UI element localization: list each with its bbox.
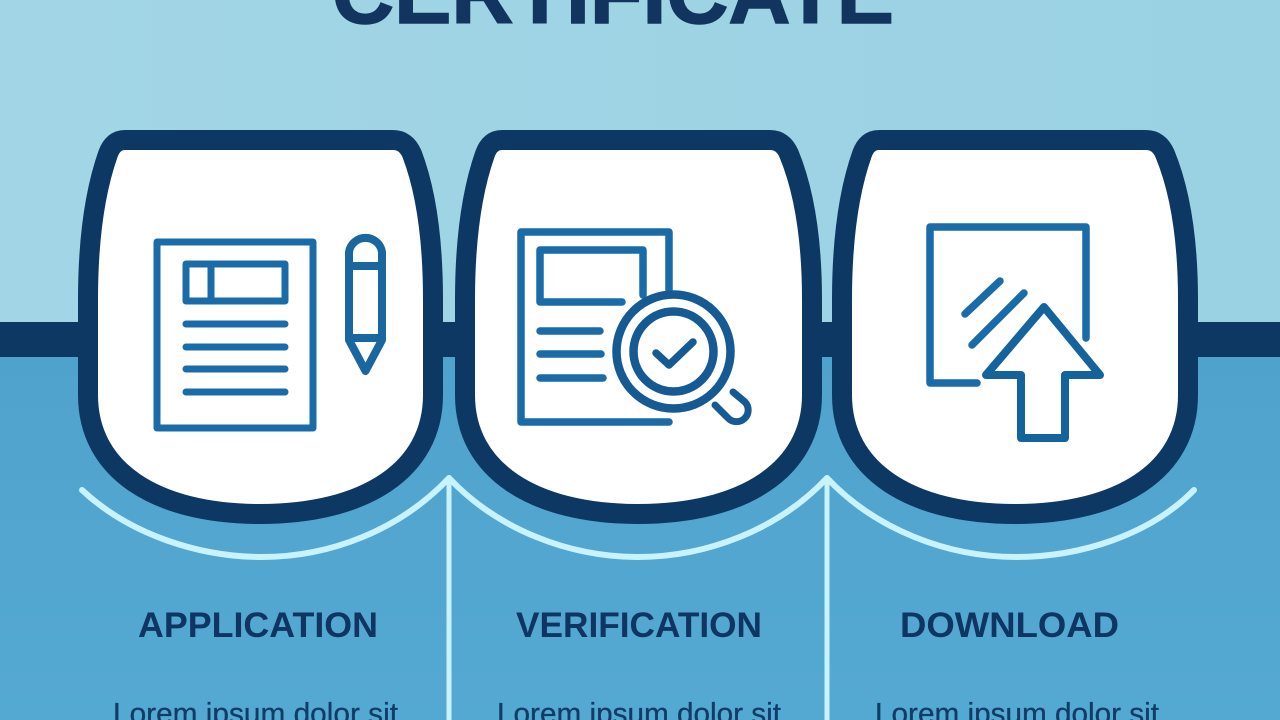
- heading: verification: VERIFICATION: [516, 606, 762, 645]
- icon: magnifier with check: [616, 294, 748, 422]
- dividers and arcs: [82, 478, 1194, 720]
- panel shape: [465, 140, 812, 514]
- panel shape: [88, 140, 433, 514]
- heading: application: APPLICATION: [138, 606, 378, 645]
- icon: pencil: [349, 238, 382, 371]
- panel shape: [842, 140, 1188, 514]
- icon: upload arrow: [986, 307, 1100, 438]
- connecting band: [0, 322, 1280, 357]
- panel: application: [88, 140, 433, 514]
- panel: download: [842, 140, 1188, 514]
- icon: document frame: [930, 227, 1086, 383]
- icon: document form: [157, 242, 313, 428]
- heading: download: DOWNLOAD: [900, 606, 1119, 645]
- panel: verification: [465, 140, 812, 514]
- icon: document: [521, 232, 669, 422]
